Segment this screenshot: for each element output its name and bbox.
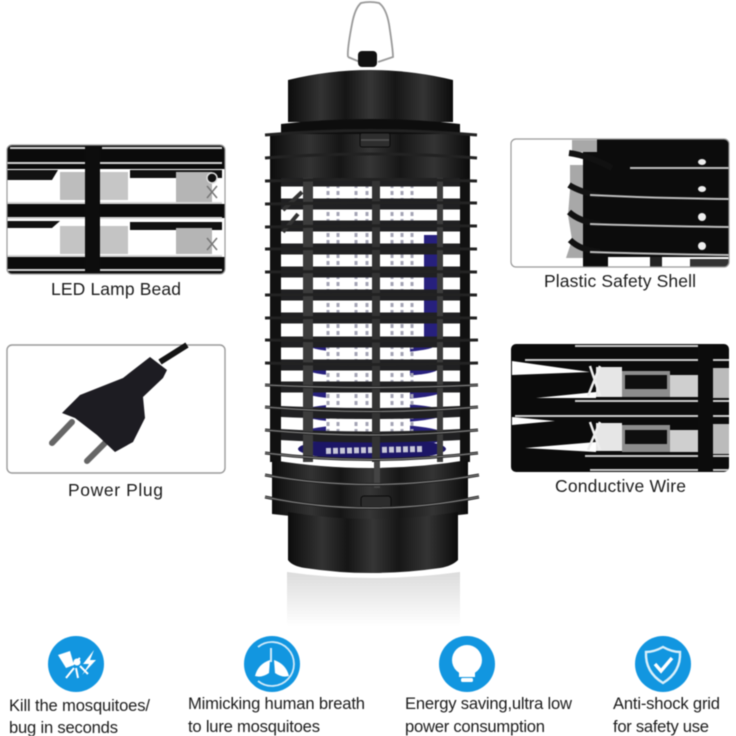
feature: kill mosquitoes [9, 636, 150, 715]
label: Conductive Wire: Conductive Wire [555, 476, 686, 496]
upper band [270, 134, 470, 180]
icon: mosquito and lightning [48, 636, 104, 692]
emitter grid marks [328, 184, 412, 438]
icon: shield check [635, 636, 691, 692]
text: Kill the mosquitoes/ [9, 696, 150, 715]
inner horizontal cage bands [270, 181, 470, 437]
label: LED Lamp Bead: LED Lamp Bead [51, 279, 181, 299]
label: Plastic Safety Shell: Plastic Safety Shell [544, 271, 696, 291]
floor reflection [287, 572, 460, 626]
text: Anti-shock grid [613, 694, 720, 713]
collar [281, 119, 460, 134]
feature: energy saving [405, 636, 573, 713]
icon: plug pins [52, 422, 110, 461]
icon: plug cord [160, 345, 187, 362]
base cylinder [288, 512, 458, 573]
panel: LED lamp bead [7, 145, 225, 274]
lamp window [269, 180, 471, 463]
vertical cage posts [269, 178, 471, 463]
top cap [288, 70, 453, 122]
bulb base lettering strip [297, 442, 447, 459]
feature: anti-shock grid [613, 636, 720, 713]
ring highlights [265, 385, 479, 508]
dark diagonal strut [283, 192, 302, 232]
text: Mimicking human breath [188, 694, 365, 713]
panel: plastic safety shell [511, 139, 729, 267]
text: Energy saving,ultra low [405, 694, 573, 713]
hook knob [358, 51, 377, 67]
icon: light bulb [439, 636, 495, 692]
product: bug zapper lantern [265, 2, 479, 626]
icon: lungs [244, 636, 300, 692]
label: to lure mosquitoes: to lure mosquitoes [188, 717, 320, 736]
feature: human breath [188, 636, 365, 713]
panel: power plug [7, 345, 225, 473]
icon: plug body [62, 357, 167, 452]
upper band latch [360, 133, 390, 147]
lower band latch [361, 496, 391, 508]
label: for safety use: for safety use [613, 717, 709, 736]
white lamp tubes [318, 234, 425, 432]
label: Power Plug: Power Plug [68, 480, 163, 500]
cage rings [265, 130, 479, 508]
lower band [272, 460, 468, 520]
label: power consumption: power consumption [405, 717, 545, 736]
hanging hook [348, 2, 393, 62]
center post lower [374, 460, 380, 488]
panel: conductive wire [511, 344, 729, 472]
blue inner discs [312, 234, 438, 444]
